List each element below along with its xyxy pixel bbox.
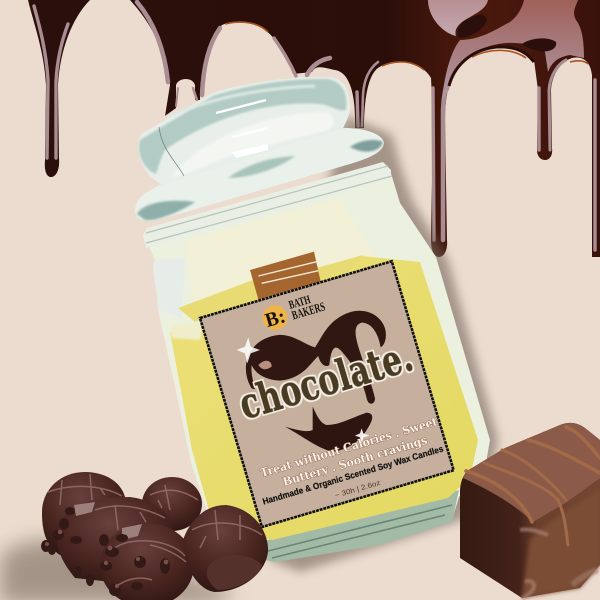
product description: Handmade & Organic Scented Soy Wax Candles xyxy=(261,444,445,507)
brand name: BATH xyxy=(287,292,313,312)
truffle middle xyxy=(57,497,173,585)
neck xyxy=(143,162,391,248)
top face xyxy=(463,423,600,522)
truffle back right xyxy=(142,477,202,531)
pink gloss on drips xyxy=(34,2,595,250)
truffle back left xyxy=(42,472,126,555)
tagline: Buttery . Sooth cravings xyxy=(281,433,429,489)
sparkles xyxy=(237,337,260,363)
chocolate heart drip on label xyxy=(237,311,386,452)
drizzle stripes xyxy=(466,427,600,545)
glass jar xyxy=(135,77,490,562)
brand name xyxy=(287,289,327,322)
label paper xyxy=(200,261,454,527)
chocolate truffles xyxy=(41,472,268,600)
truffle right xyxy=(183,505,268,592)
chocolate bar piece xyxy=(460,423,600,598)
label text xyxy=(228,330,451,520)
lid knob xyxy=(138,77,350,185)
label xyxy=(200,261,454,527)
green glass base xyxy=(210,490,459,562)
jar body xyxy=(145,170,490,561)
product name: chocolate. xyxy=(234,332,418,429)
truffle texture xyxy=(48,474,262,590)
yellow wax xyxy=(170,256,478,540)
burn time and weight: ~ 30h | 2.6oz xyxy=(334,480,382,500)
glossy highlights top right xyxy=(428,0,488,36)
chocolate drips xyxy=(28,0,600,257)
jar shadow xyxy=(270,115,498,572)
lower flange xyxy=(135,128,384,221)
wick xyxy=(250,252,321,299)
truffle front xyxy=(100,523,194,600)
brand logo mark: B: xyxy=(263,305,288,332)
brand name: BAKERS xyxy=(290,299,327,322)
tagline: Treat without Calories . Sweet xyxy=(259,414,440,480)
truffle shadow xyxy=(0,539,235,600)
